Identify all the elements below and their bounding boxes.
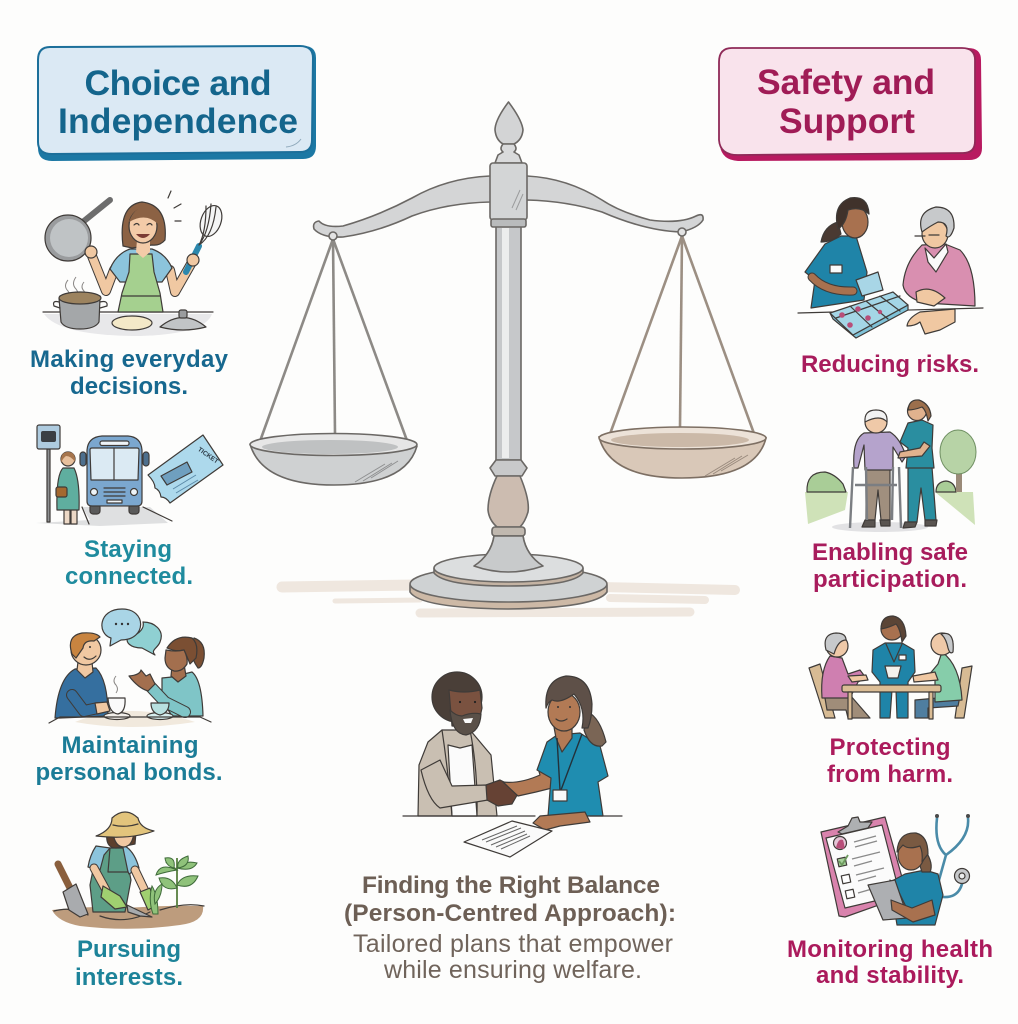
label: Maintaining <box>62 732 198 759</box>
label: from harm. <box>827 761 953 788</box>
left pan <box>250 434 417 485</box>
icon: three people at a table <box>809 616 972 719</box>
heading text: (Person-Centred Approach): <box>344 900 676 927</box>
column <box>496 226 521 460</box>
label: Staying <box>84 536 172 563</box>
panel: Maintaining personal bonds <box>36 609 222 786</box>
icon: nurse and elder with pill organiser <box>798 198 983 338</box>
right pan <box>599 427 766 478</box>
base <box>410 585 607 609</box>
panel: Pursuing interests <box>52 812 204 991</box>
heading text: Finding the Right Balance <box>362 872 660 899</box>
heading text: Safety and <box>757 62 935 102</box>
icon: bus stop, bus and ticket <box>36 425 223 526</box>
label: participation. <box>813 566 967 593</box>
label: interests. <box>75 964 183 991</box>
left pan strings <box>259 239 409 446</box>
label: Pursuing <box>77 936 181 963</box>
panel: Protecting from harm <box>809 616 972 788</box>
label: Enabling safe <box>812 539 968 566</box>
right pan strings <box>610 236 756 439</box>
flare <box>474 536 543 572</box>
label: Reducing risks. <box>801 351 979 378</box>
icon: cooking with pan and whisk <box>43 191 226 336</box>
label: Monitoring health <box>787 936 993 963</box>
balance scale <box>250 102 766 613</box>
ground shadow <box>282 585 735 613</box>
panel: Staying connected <box>36 425 223 590</box>
panel: Finding the Right Balance <box>344 672 676 984</box>
block <box>490 163 527 220</box>
heading text: Support <box>779 101 915 141</box>
finial <box>495 102 523 144</box>
label: Making everyday <box>30 346 229 373</box>
label: and stability. <box>816 962 964 989</box>
beam <box>314 176 703 237</box>
icon: handshake between client and nurse <box>403 672 622 857</box>
label: connected. <box>65 563 193 590</box>
heading text: Independence <box>58 101 298 141</box>
body text: while ensuring welfare. <box>383 956 642 984</box>
lower knob and vase <box>490 460 527 476</box>
heading text: Choice and <box>84 63 272 103</box>
icon: bus stop, bus and ticket: TICKET <box>196 446 219 465</box>
label: personal bonds. <box>36 759 222 786</box>
panel: Monitoring health and stability <box>787 814 993 989</box>
icon: clipboard, nurse and stethoscope <box>821 814 970 925</box>
panel: Safety and Support heading <box>719 48 982 161</box>
icon: two people chatting over coffee <box>49 609 211 727</box>
body text: Tailored plans that empower <box>353 930 673 958</box>
panel: Making everyday decisions <box>30 191 229 400</box>
icon: nurse helping elder with walker <box>805 400 976 532</box>
panel: Choice and Independence heading <box>38 46 316 161</box>
panel: Enabling safe participation <box>805 400 976 593</box>
label: decisions. <box>70 373 188 400</box>
label: Protecting <box>830 734 950 761</box>
icon: gardener with trowel and plants <box>52 812 204 929</box>
panel: Reducing risks <box>798 198 983 378</box>
